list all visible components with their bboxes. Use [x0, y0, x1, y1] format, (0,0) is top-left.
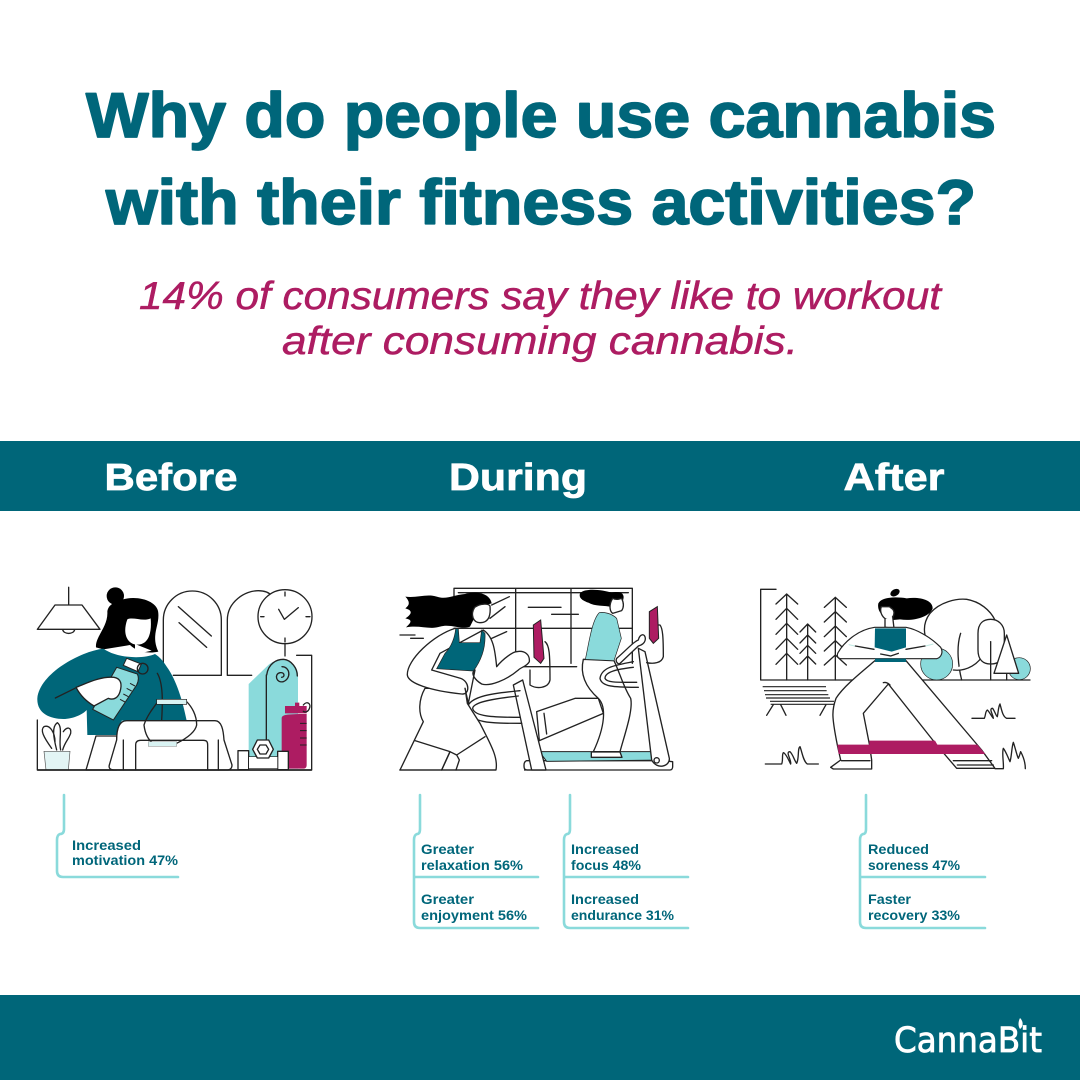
subtitle: 14% of consumers say they like to workout — [139, 275, 943, 318]
subtitle — [139, 275, 943, 363]
header band: before, during, after: Before — [104, 457, 238, 499]
callout: during, focus and endurance: Increased — [571, 842, 639, 857]
potted plant — [42, 723, 71, 770]
hair and head — [96, 587, 158, 654]
window — [454, 588, 632, 667]
illustration: woman drinking before workout — [37, 587, 312, 770]
callout: after: soreness 47% — [868, 858, 960, 873]
callout: after: Reduced — [868, 842, 929, 857]
treadmill 2 deck — [524, 750, 673, 770]
bushes — [921, 599, 1030, 680]
callout: during, relaxation and enjoyment: enjoyment 56% — [421, 908, 527, 923]
hair and head — [878, 587, 933, 628]
runner 2 hair — [580, 590, 624, 607]
dumbbell — [238, 740, 288, 770]
runner 2 back leg — [537, 698, 603, 741]
header band: before, during, after: After — [844, 457, 945, 499]
callout: during, relaxation and enjoyment: Greater — [421, 892, 475, 907]
callout: before: Increased — [72, 838, 141, 853]
callout: during, relaxation and enjoyment: relaxation 56% — [421, 858, 523, 873]
resistance band — [837, 741, 985, 754]
illustration: woman with resistance band outdoors — [761, 587, 1030, 769]
callout: during, relaxation and enjoyment: Greater — [421, 842, 475, 857]
callout: during, focus and endurance: Increased — [571, 892, 639, 907]
runner 1 hair — [405, 593, 492, 628]
treadmill 1 frame — [467, 620, 550, 770]
header band: before, during, after — [0, 441, 1080, 511]
footer band — [0, 995, 1080, 1080]
callout: during, focus and endurance — [564, 795, 688, 928]
logo: CannaBit: CannaBit — [894, 1021, 1042, 1061]
hand — [76, 677, 121, 706]
illustration: two women on treadmills — [399, 588, 673, 770]
runner 2 body — [582, 659, 631, 752]
yoga mat — [249, 659, 298, 769]
sweater — [37, 649, 187, 735]
gym bag — [109, 699, 232, 770]
title: Why do people use cannabis — [86, 81, 996, 151]
water bottle — [282, 703, 310, 769]
title — [86, 81, 996, 238]
trees — [776, 594, 846, 680]
grass — [765, 747, 818, 764]
legs — [86, 736, 117, 770]
header band: before, during, after: During — [449, 457, 587, 499]
title: with their fitness activities? — [105, 168, 976, 238]
callout: after — [860, 795, 985, 928]
runner 1 torso — [407, 628, 529, 703]
callout: during, focus and endurance: focus 48% — [571, 858, 641, 873]
treadmill 2 frame — [600, 607, 669, 766]
subtitle: after consuming cannabis. — [282, 320, 798, 363]
callout: before — [57, 795, 178, 877]
callout: after: recovery 33% — [868, 908, 960, 923]
torso — [837, 627, 942, 662]
callout: before: motivation 47% — [72, 853, 178, 868]
callout: during, focus and endurance: endurance 31% — [571, 908, 674, 923]
callout: after: Faster — [868, 892, 912, 907]
runner 1 legs — [400, 688, 496, 770]
legs — [831, 661, 995, 769]
bench — [763, 687, 834, 704]
callout: during, relaxation and enjoyment — [414, 795, 538, 928]
bottle in hand — [93, 658, 148, 720]
